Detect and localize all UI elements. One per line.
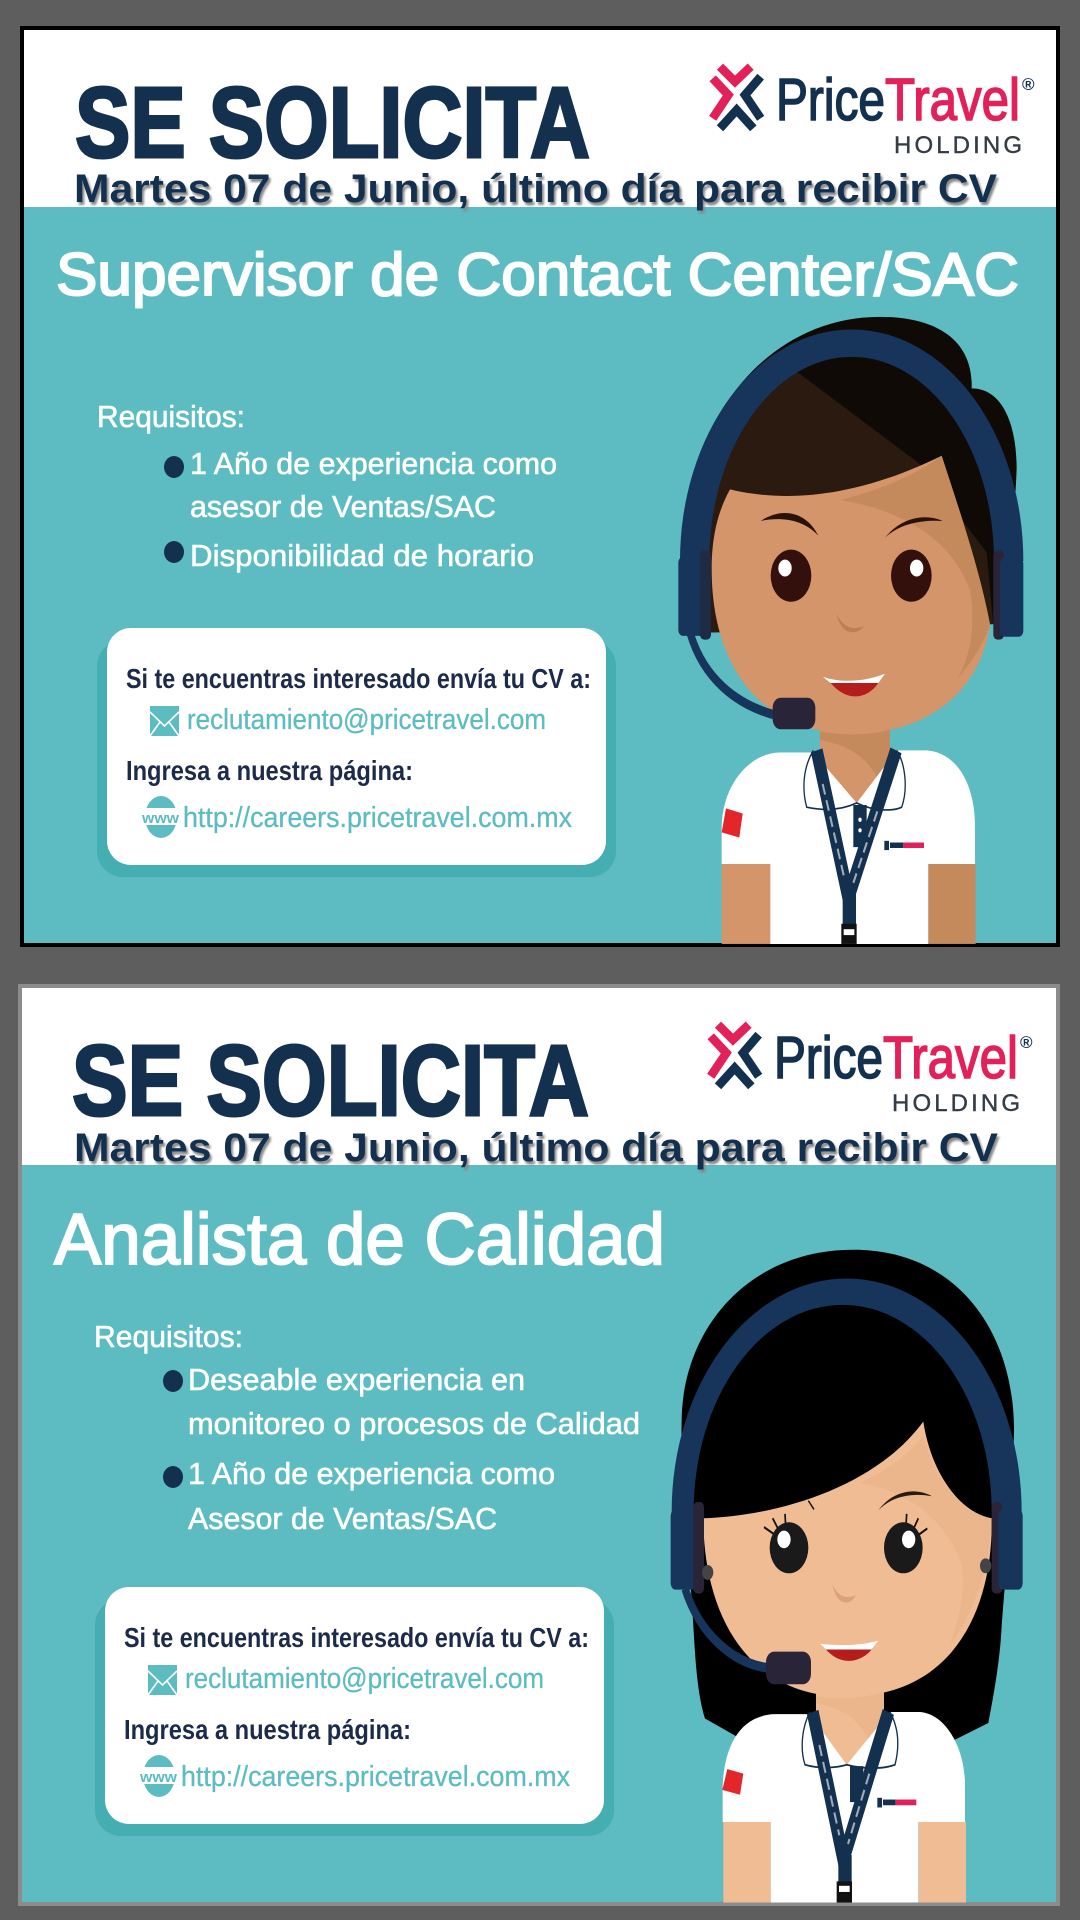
logo mark: [711, 1025, 759, 1086]
contact card: http://careers.pricetravel.com.mx: [181, 1761, 570, 1793]
contact card: Ingresa a nuestra página:: [126, 755, 413, 786]
illustration: agent with brown hair: [678, 317, 1023, 944]
logo: PriceTravel Holding: ®: [1020, 1033, 1033, 1052]
logo: PriceTravel Holding: [713, 67, 1035, 159]
requirements list: asesor de Ventas/SAC: [190, 489, 496, 524]
contact card: Si te encuentras interesado envía tu CV a:: [124, 1622, 589, 1653]
contact card: [97, 628, 616, 877]
requirements list: 1 Año de experiencia como: [190, 446, 557, 481]
logo: PriceTravel Holding: Price: [776, 67, 885, 133]
job title: Analista de Calidad: [54, 1200, 665, 1280]
deadline text: Martes 07 de Junio, último día para recibir CV: [74, 167, 997, 211]
logo: PriceTravel Holding: ®: [1022, 75, 1035, 94]
panel: Analista de Calidad: [20, 986, 1058, 1904]
icon: envelope: [150, 706, 179, 736]
requirements list: monitoreo o procesos de Calidad: [188, 1406, 640, 1441]
logo: PriceTravel Holding: Travel: [885, 67, 1020, 133]
icon: www globe: www: [139, 1769, 177, 1786]
requirements list: Disponibilidad de horario: [190, 538, 534, 573]
panel 2 teal area: [22, 1165, 1056, 1902]
panel: Supervisor de Contact Center: [22, 28, 1058, 945]
requirements list: [94, 1319, 640, 1536]
requirements list: Asesor de Ventas/SAC: [188, 1501, 497, 1536]
contact card: Ingresa a nuestra página:: [124, 1714, 411, 1745]
icon: www globe: [139, 1755, 179, 1797]
illustration: agent with long black hair: [671, 1250, 1023, 1903]
contact card: http://careers.pricetravel.com.mx: [183, 802, 572, 834]
icon: www globe: [141, 796, 181, 838]
heading: SE SOLICITA: SE SOLICITA: [72, 1025, 589, 1137]
logo: PriceTravel Holding: HOLDING: [894, 132, 1022, 159]
requirements list: Requisitos:: [94, 1319, 243, 1354]
icon: envelope: [148, 1665, 177, 1695]
contact card: reclutamiento@pricetravel.com: [187, 704, 546, 736]
icon: www globe: www: [141, 810, 179, 827]
heading: SE SOLICITA: SE SOLICITA: [75, 67, 590, 179]
contact card: reclutamiento@pricetravel.com: [185, 1663, 544, 1695]
requirements list: Requisitos:: [97, 399, 245, 434]
panel 1 teal area: [24, 207, 1056, 943]
requirements list: Deseable experiencia en: [188, 1362, 525, 1397]
requirements list: 1 Año de experiencia como: [188, 1456, 555, 1491]
panel 2 white background: [20, 986, 1058, 1904]
logo: PriceTravel Holding: [711, 1025, 1033, 1117]
panel 1 white background: [22, 28, 1058, 945]
contact card: [95, 1587, 614, 1836]
job title: Supervisor de Contact Center/SAC: [56, 241, 1019, 308]
logo: PriceTravel Holding: Price: [774, 1025, 883, 1091]
contact card: Si te encuentras interesado envía tu CV a:: [126, 663, 591, 694]
logo: PriceTravel Holding: HOLDING: [892, 1090, 1020, 1117]
logo mark: [713, 67, 761, 128]
logo: PriceTravel Holding: Travel: [883, 1025, 1018, 1091]
requirements list: [97, 399, 557, 573]
deadline text: Martes 07 de Junio, último día para recibir CV: [74, 1126, 998, 1170]
